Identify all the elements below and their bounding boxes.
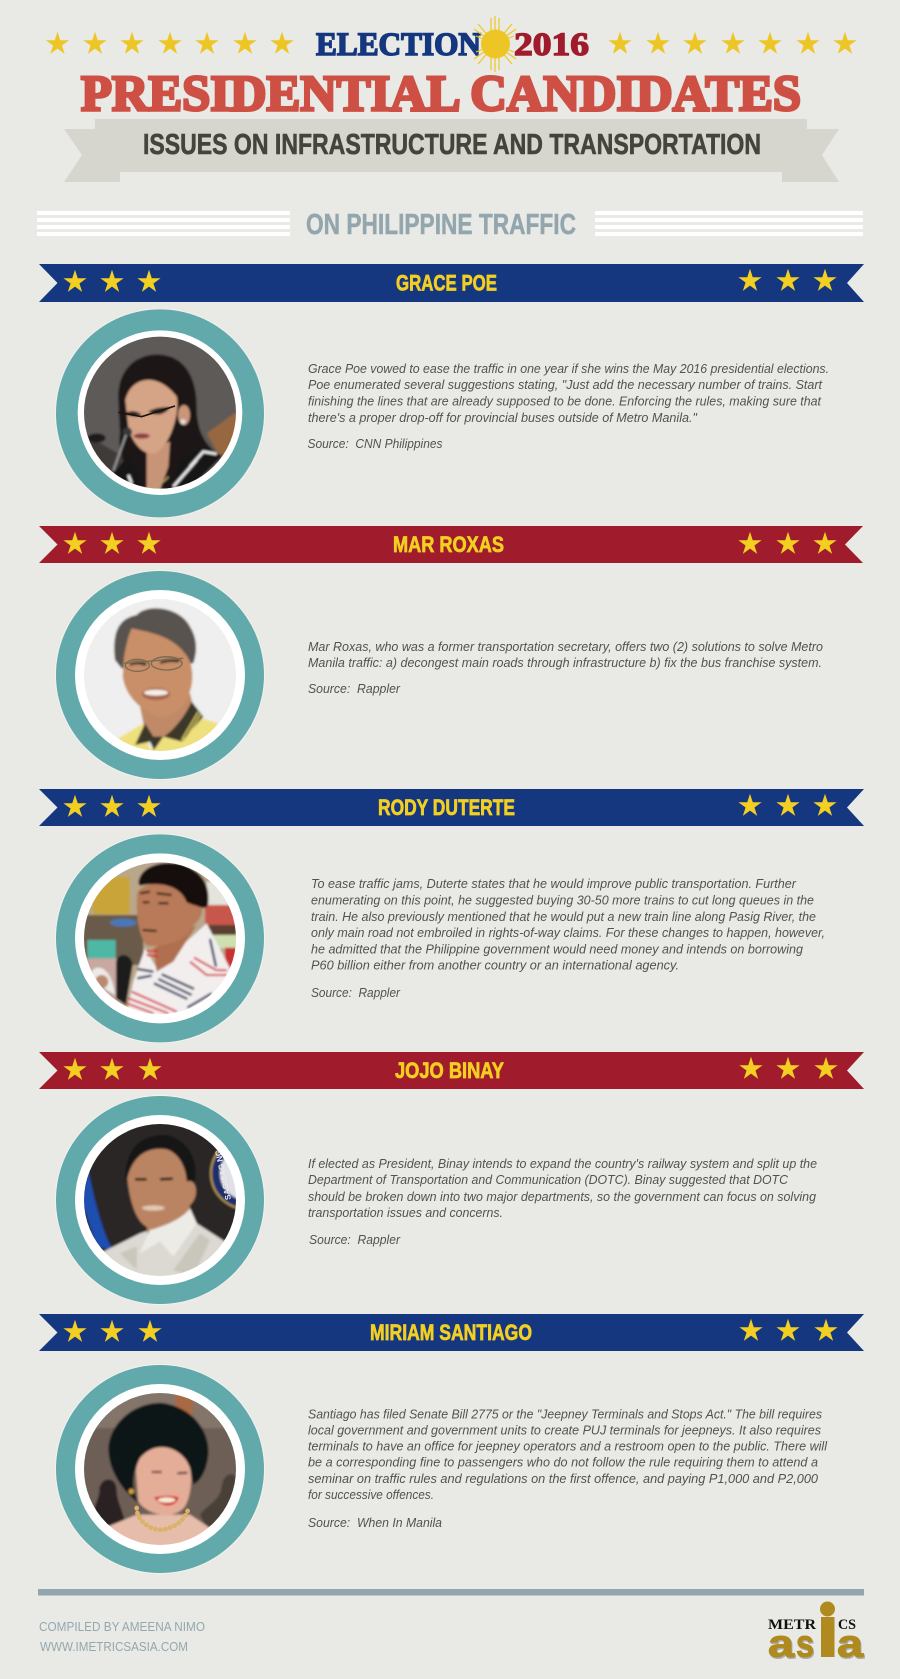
panel: Grace Poe <box>39 264 864 518</box>
text: Jojo Binay: should be broken down into two major departments, so the government can focus on solving <box>308 1189 817 1204</box>
text: Mar Roxas: Mar Roxas, who was a former transportation secretary, offers two (2) solutions to solve Metro <box>308 639 823 654</box>
logo: Metrics Asia: s <box>797 1625 815 1667</box>
text: Mar Roxas: Manila traffic: a) decongest main roads through infrastructure b) fix the bus franchise system. <box>308 655 822 670</box>
election label: ELECTION <box>316 27 481 63</box>
credit: compiled by: COMPILED BY AMEENA NIMO <box>39 1619 205 1634</box>
text: Rody Duterte: To ease traffic jams, Duterte states that he would improve public transportation. Further <box>311 876 797 891</box>
banner: Grace Poe: GRACE POE <box>396 270 497 296</box>
text: Mar Roxas: Source: Rappler <box>308 681 401 696</box>
logo: Metrics Asia <box>768 1602 865 1667</box>
banner: Mar Roxas <box>39 526 863 563</box>
text: Miriam Santiago: terminals to have an office for jeepney operators and a restroom open to the public. There will <box>308 1438 828 1454</box>
credit: website: WWW.IMETRICSASIA.COM <box>40 1639 188 1654</box>
text: Rody Duterte: Source: Rappler <box>311 985 401 1000</box>
panel: Miriam Santiago <box>39 1314 864 1574</box>
section heading with stripes <box>37 209 863 241</box>
portrait: Grace Poe <box>55 308 265 518</box>
text: Rody Duterte: enumerating on this point, he suggested buying 30-50 more trains to cut long queues in the <box>311 892 814 908</box>
text: Grace Poe: Grace Poe vowed to ease the traffic in one year if she wins the May 2016 presidential elections. <box>308 361 829 376</box>
icon: sun <box>474 16 516 72</box>
section heading text: ON PHILIPPINE TRAFFIC <box>306 209 576 241</box>
logo: Metrics Asia: a <box>837 1624 864 1666</box>
text: Grace Poe: Source: CNN Philippines <box>308 436 443 451</box>
text: Jojo Binay: transportation issues and concerns. <box>308 1205 503 1220</box>
title: PRESIDENTIAL CANDIDATES <box>81 66 801 122</box>
text: Rody Duterte <box>311 876 825 1000</box>
text: Grace Poe: there's a proper drop-off for provincial buses outside of Metro Manila." <box>308 410 698 425</box>
text: Grace Poe: finishing the lines that are already supposed to be done. Enforcing the rules, making sure that <box>308 394 822 408</box>
banner: Miriam Santiago <box>39 1314 864 1351</box>
text: Rody Duterte: only main road not embroiled in rights-of-way claims. For these changes to happen, however, <box>311 925 825 940</box>
portrait: Jojo Binay <box>55 1095 282 1305</box>
subtitle ribbon <box>64 119 839 182</box>
portrait: Rody Duterte <box>55 833 265 1043</box>
panel: Mar Roxas <box>39 526 863 780</box>
logo: Metrics Asia: a <box>838 1625 865 1667</box>
text: Mar Roxas <box>308 639 823 696</box>
banner: Rody Duterte <box>39 789 864 826</box>
text: Jojo Binay <box>308 1156 817 1247</box>
text: Miriam Santiago <box>308 1406 828 1530</box>
logo: Metrics Asia: s <box>796 1624 814 1666</box>
banner: Miriam Santiago: MIRIAM SANTIAGO <box>370 1320 532 1345</box>
banner: Mar Roxas: MAR ROXAS <box>393 532 504 557</box>
portrait: Mar Roxas <box>55 570 265 780</box>
text: Jojo Binay: Source: Rappler <box>309 1232 401 1247</box>
text: Jojo Binay: Department of Transportation and Communication (DOTC). Binay suggested that DOTC <box>308 1172 789 1187</box>
subtitle: ISSUES ON INFRASTRUCTURE AND TRANSPORTATION <box>143 129 761 161</box>
portrait: Miriam Santiago <box>55 1364 265 1574</box>
text: Miriam Santiago: be a corresponding fine to passengers who do not follow the rule requiring them to attend a <box>308 1455 818 1470</box>
footer <box>38 1589 865 1667</box>
logo: Metrics Asia: a <box>769 1625 796 1667</box>
logo: Metrics Asia: a <box>768 1624 795 1666</box>
header <box>46 16 857 182</box>
logo: Metrics Asia: CS <box>838 1617 856 1633</box>
text: Rody Duterte: P60 billion either from another country or an international agency. <box>311 958 679 972</box>
icon: right row of stars <box>608 32 857 54</box>
logo: Metrics Asia: METR <box>768 1617 816 1633</box>
icon: left row of stars <box>46 32 294 54</box>
portrait: Jojo Binay: SAGISAG NG <box>214 1149 233 1201</box>
banner: Grace Poe <box>39 264 864 302</box>
text: Miriam Santiago: Santiago has filed Senate Bill 2775 or the "Jeepney Terminals and Stops Act." The bill requires <box>308 1406 822 1422</box>
2016 label: 2016 <box>514 27 589 63</box>
text: Jojo Binay: If elected as President, Binay intends to expand the country's railway system and split up the <box>308 1156 817 1171</box>
text: Rody Duterte: he admitted that the Philippine government would need money and intends on borrowing <box>311 942 804 956</box>
text: Rody Duterte: train. He also previously mentioned that he would put a new train line along Pasig River, the <box>311 909 816 924</box>
panel: Rody Duterte <box>39 789 864 1043</box>
banner: Jojo Binay <box>39 1052 864 1089</box>
banner: Rody Duterte: RODY DUTERTE <box>378 795 515 820</box>
text: Miriam Santiago: for successive offences. <box>308 1487 434 1502</box>
banner: Jojo Binay: JOJO BINAY <box>395 1058 504 1083</box>
text: Miriam Santiago: local government and government units to create PUJ terminals for jeepneys. It also requires <box>308 1422 821 1438</box>
text: Grace Poe <box>308 361 829 451</box>
text: Grace Poe: Poe enumerated several suggestions stating, "Just add the necessary number of trains. Start <box>308 377 823 392</box>
text: Miriam Santiago: Source: When In Manila <box>308 1515 442 1530</box>
panel: Jojo Binay <box>39 1052 864 1305</box>
text: Miriam Santiago: seminar on traffic rules and regulations on the first offence, and paying P1,000 and P2,000 <box>308 1471 819 1486</box>
